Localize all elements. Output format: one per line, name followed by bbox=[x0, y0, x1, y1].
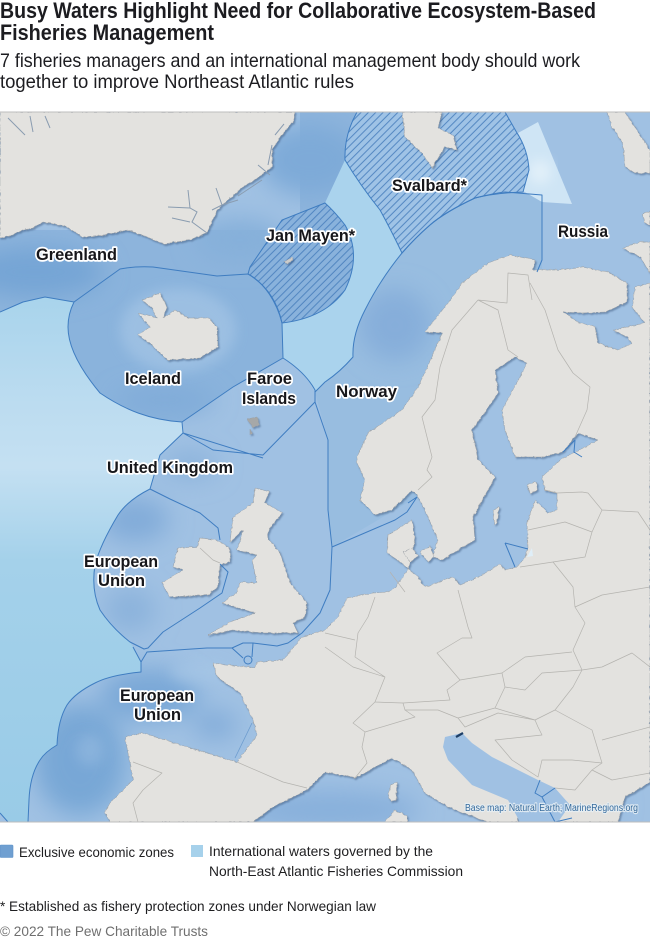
label: European Union (Ireland): European bbox=[84, 552, 158, 571]
Greenland zone tint bbox=[0, 112, 357, 312]
hatching: Jan Mayen bbox=[248, 203, 354, 323]
subtitle: together to improve Northeast Atlantic rules bbox=[0, 71, 354, 93]
land: Great Britain bbox=[208, 488, 307, 635]
label: Iceland: Iceland bbox=[125, 369, 181, 388]
land: Ireland bbox=[162, 538, 230, 597]
Greenland fjords bbox=[8, 116, 284, 233]
title bbox=[0, 0, 596, 45]
land bbox=[0, 112, 650, 822]
label: European Union (Bay of Biscay) bbox=[120, 686, 194, 724]
land: Novaya Zemlya bbox=[607, 112, 650, 173]
legend item: exclusive economic zones: Exclusive economic zones bbox=[19, 844, 174, 860]
international waters: Atlantic bbox=[0, 297, 183, 822]
land: Iceland bbox=[138, 293, 218, 360]
Iceland zone tint bbox=[68, 267, 283, 422]
international waters: Barents Sea loophole bbox=[518, 122, 572, 204]
land: Faroe Islands bbox=[247, 417, 259, 435]
legend item: international waters: International waters governed by the bbox=[209, 843, 433, 859]
land: Greenland bbox=[0, 112, 295, 244]
label: European Union (Bay of Biscay): European bbox=[120, 686, 194, 705]
hatched zone: Jan Mayen bbox=[248, 203, 354, 323]
land: continental Europe bbox=[105, 255, 650, 822]
map bbox=[0, 112, 650, 830]
region labels bbox=[36, 176, 608, 724]
land: Jan Mayen island bbox=[284, 257, 293, 264]
label: European Union (Bay of Biscay): Union bbox=[134, 705, 181, 724]
label: Norway: Norway bbox=[336, 382, 398, 401]
footnote: * Established as fishery protection zones under Norwegian law bbox=[0, 898, 377, 914]
subtitle bbox=[0, 50, 580, 93]
hatching: Svalbard bbox=[345, 112, 529, 253]
land: Danish islands bbox=[403, 546, 434, 562]
land: Gotland bbox=[493, 507, 499, 525]
label: European Union (Ireland) bbox=[84, 552, 158, 590]
country borders bbox=[133, 273, 650, 822]
exclusive economic zone boundaries bbox=[0, 192, 582, 822]
hatched zone: Svalbard bbox=[346, 116, 528, 180]
legend bbox=[0, 843, 463, 879]
legend item: international waters bbox=[191, 843, 463, 879]
label: Faroe Islands bbox=[242, 369, 296, 408]
land: Corsica bbox=[388, 782, 397, 802]
land: Saaremaa bbox=[527, 482, 538, 494]
label: European Union (Ireland): Union bbox=[98, 571, 145, 590]
legend item: international waters: North-East Atlantic Fisheries Commission bbox=[209, 863, 463, 879]
label: Russia: Russia bbox=[558, 222, 608, 241]
land: Sardinia bbox=[385, 810, 408, 822]
Norway zone tint bbox=[335, 516, 383, 545]
subtitle: 7 fisheries managers and an international management body should work bbox=[0, 50, 580, 72]
Slovenia coastal zone bbox=[456, 733, 463, 737]
label: Svalbard: Svalbard* bbox=[392, 176, 467, 195]
label: Greenland: Greenland bbox=[36, 245, 117, 264]
Adriatic Sea bbox=[443, 733, 570, 822]
label: Jan Mayen: Jan Mayen* bbox=[266, 226, 355, 245]
Curonian lagoon bbox=[527, 548, 533, 557]
title: Fisheries Management bbox=[0, 20, 215, 45]
land: Svalbard bbox=[402, 112, 457, 168]
ocean depth shading bbox=[0, 117, 430, 822]
label: Faroe Islands: Faroe bbox=[247, 369, 292, 388]
label: United Kingdom: United Kingdom bbox=[107, 458, 233, 477]
international waters: Norwegian Sea bbox=[282, 160, 402, 392]
label: Faroe Islands: Islands bbox=[242, 389, 296, 408]
map frame lines bbox=[0, 112, 650, 822]
